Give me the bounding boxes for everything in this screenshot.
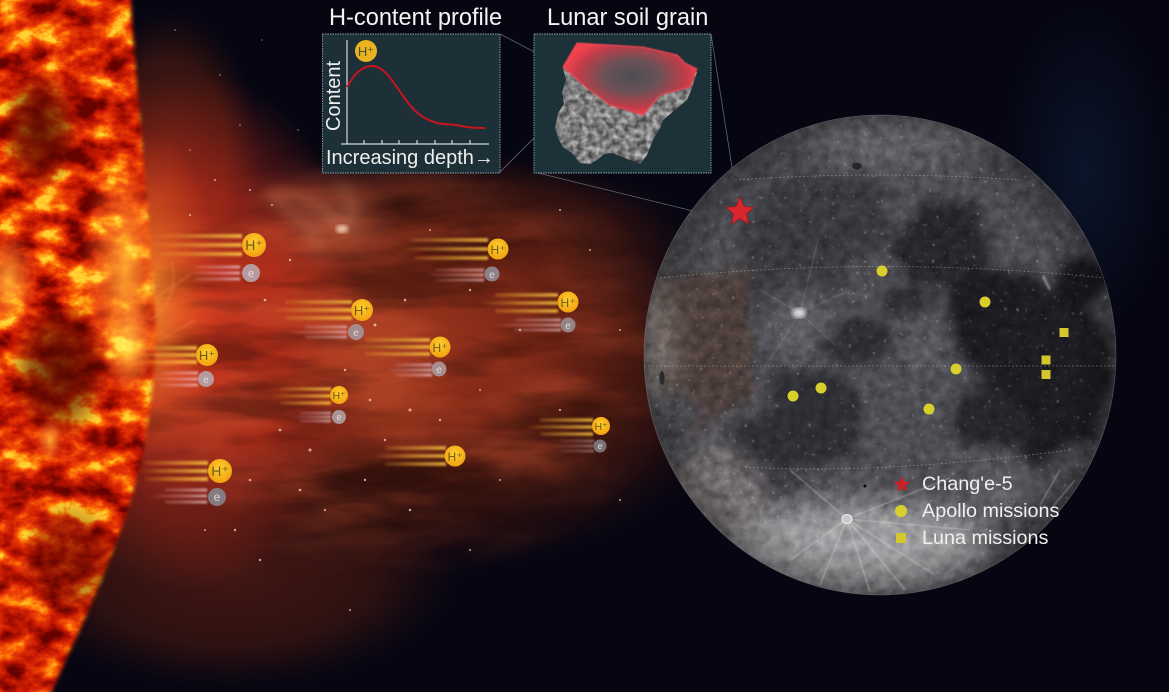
star field [174,29,641,611]
particle pair 4: H⁺ [560,296,576,310]
heading: H-content profile: H-content profile [329,5,502,31]
particle pair 5: e [436,365,442,376]
legend: Luna missions: Luna missions [922,527,1049,549]
axis label: Content: Content [323,61,345,131]
particle pair 8: e [597,441,603,451]
particle pair 3: e [353,328,359,339]
particle pair 2 [400,238,508,282]
heading: Lunar soil grain: Lunar soil grain [547,5,708,31]
sun: bright active region [82,163,156,377]
legend [894,473,1060,549]
sun: coronal loops [150,262,195,340]
particle pair 7 [270,386,348,424]
moon: bright highlands [644,123,1036,594]
particle pair 3: H⁺ [354,303,370,318]
markers: Apollo missions [788,266,990,414]
particle pair 3 [272,299,373,340]
particle pair 10 [138,459,232,506]
icon: H+ ion: H⁺ [358,44,374,59]
particle pair 6: H⁺ [199,348,215,363]
icon: H+ ion [355,40,377,62]
moon: dark maria [665,172,1112,493]
H+ and electron particles [130,233,610,506]
sun: dark granulation patches [10,300,110,440]
particle pair 6: e [203,375,209,386]
legend: Chang'e-5: Chang'e-5 [922,473,1013,495]
particle pair 8: H⁺ [594,421,608,433]
nebula: solar wind glow [76,22,675,678]
particle pair 1: H⁺ [245,237,263,253]
particle pair 10: H⁺ [211,463,229,479]
inset connector lines [500,34,738,220]
moon [644,115,1116,595]
moon: craters and rays [760,240,1075,592]
particle pair 1 [150,233,266,282]
particle pair 5: H⁺ [432,341,448,355]
background: blue haze [1001,5,1169,335]
particle pair 4: e [565,321,571,332]
legend: Apollo missions: Apollo missions [922,500,1060,522]
markers: Luna missions [1042,328,1068,379]
chart: H content curve [347,66,485,128]
particle 9 [372,446,466,466]
sun [0,0,195,692]
particle pair 10: e [214,490,221,504]
particle pair 2: e [489,270,495,281]
particle 9: H⁺ [448,450,462,464]
panel: H-content profile [322,34,500,173]
particle pair 1: e [248,268,254,280]
panel: Lunar soil grain [534,34,711,173]
marker: Chang'e-5 landing site [726,197,754,224]
particle pair 7: H⁺ [332,390,346,402]
particle pair 6 [130,344,218,387]
particle pair 5 [350,336,450,376]
particle pair 8 [525,417,610,452]
moon: bright specks [644,115,1116,595]
soil grain rock [555,68,697,164]
particle pair 2: H⁺ [490,243,506,257]
moon: grid lines [644,175,1116,469]
nebula: bright wisp [270,185,353,255]
particle pair 7: e [336,412,342,422]
axis label: Increasing depth: Increasing depth→ [326,147,494,169]
particle pair 4 [478,292,578,332]
chart axes [341,40,489,144]
moon: surface texture [644,115,1116,595]
hydrogen-rich rim [563,43,697,115]
